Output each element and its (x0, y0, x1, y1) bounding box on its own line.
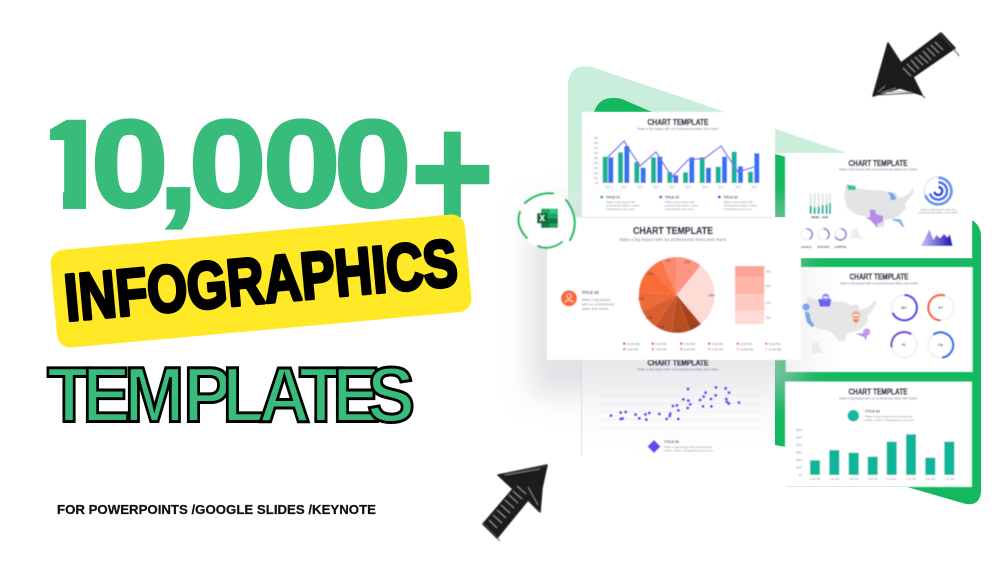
legend: title 02: TITLE 02 (665, 195, 679, 199)
bar chart: $300 (796, 451, 803, 455)
callout: title 01: TITLE 01 (865, 410, 880, 414)
bars and trend line: $50 (594, 157, 599, 160)
bar strip: mon-sat (810, 193, 831, 219)
dark green backdrop shape (594, 98, 981, 504)
time legend: 9:00 PM (712, 347, 723, 351)
stacked percentage bar: 5% (766, 301, 771, 305)
callout: title 01: TITLE 01 (664, 440, 679, 444)
stacked percentage bar: 8% (766, 284, 771, 288)
bar chart: 7:00 PM (944, 477, 954, 481)
pie chart (638, 257, 715, 333)
donut: FL (891, 332, 917, 358)
purple donut stats (801, 229, 847, 249)
headline: 10,000+: 0 (91, 94, 168, 233)
slide title: CHART TEMPLATE (848, 388, 908, 396)
slide subtitle: Make a big impact with our professional slides and charts (638, 368, 719, 372)
time legend: 10:00 PM (740, 347, 754, 351)
legend: title 01 (600, 195, 640, 211)
bars and trend line: 2016 (702, 186, 708, 189)
purple donut stats: GOALS (801, 245, 811, 249)
donut: KY (928, 295, 953, 320)
US map with highlighted states (844, 185, 914, 240)
bars and trend line: 2019 (751, 186, 757, 189)
headline: 10,000+: 0 (263, 94, 340, 233)
slide: grouped bar and line chart (582, 112, 775, 217)
headline: 10,000+: 0 (334, 94, 411, 233)
time legend: 6:00 PM (626, 347, 638, 351)
time legend: 4:00 PM (740, 342, 752, 346)
pie chart: 5% (691, 325, 695, 329)
legend: title 02 (659, 195, 699, 211)
stacked percentage bar: 5% (766, 270, 771, 274)
callout: title 01: Make a big impact with professional (664, 445, 712, 449)
bar chart: 6:00 PM (925, 477, 935, 481)
bar chart: $200 (796, 458, 803, 462)
concentric ring gauge (919, 177, 958, 215)
legend: title 02: professional slides, charts, (665, 204, 699, 208)
donut: KY: KY (938, 306, 944, 310)
pie chart: 9% (666, 259, 670, 263)
bars and trend line: 2014 (669, 186, 675, 189)
callout: title 01: Make a big impact with professional (865, 414, 913, 418)
slide title: CHART TEMPLATE (850, 272, 909, 282)
time legend: 8:00 PM (684, 347, 695, 351)
bar chart: $100 (796, 465, 803, 469)
legend: title 03 (718, 195, 758, 211)
slide title: CHART TEMPLATE (648, 358, 708, 368)
concentric ring gauge: professional slides and charts (919, 211, 958, 215)
slide title: CHART TEMPLATE (848, 159, 908, 168)
pie chart: 12% (684, 260, 690, 264)
bars and trend line: 2015 (685, 186, 691, 189)
bars and trend line: $0 (595, 182, 599, 185)
pie chart: 28% (708, 294, 715, 298)
bars and trend line: $90 (594, 137, 599, 140)
donut: WY: WY (901, 306, 907, 310)
icon: Excel: X (540, 214, 546, 223)
bars and trend line: 2017 (718, 186, 724, 189)
bars and trend line: $70 (594, 147, 599, 150)
slide: scatter plot (582, 358, 774, 456)
legend: title 03: professional slides, charts, (724, 204, 758, 208)
time legend: 7:00 PM (655, 347, 667, 351)
bar strip: mon-sat: MON - SAT (811, 215, 829, 219)
bar chart: 4:00 PM (887, 477, 897, 481)
callout: title 01 (648, 440, 714, 453)
bars and trend line (594, 137, 759, 189)
headline: 10,000+: 1 (34, 95, 111, 233)
time legend (623, 342, 782, 351)
bar chart: $0 (799, 473, 803, 477)
bar chart: 1:00 PM (829, 477, 839, 481)
pie chart: 12% (638, 297, 644, 301)
bars and trend line: 2010 (605, 186, 611, 189)
map with location pins (802, 294, 877, 354)
bars and trend line: $20 (594, 172, 599, 175)
slide subtitle: Make a big impact with our professional slides and charts (839, 396, 917, 400)
pie chart: 8% (677, 329, 681, 333)
subtitle: supported apps: FOR POWERPOINTS /GOOGLE SLIDES /KEYNOTE (57, 502, 376, 517)
badge: Excel icon in dashed ring (519, 193, 575, 249)
purple donut stats: CAPITAL (834, 245, 847, 249)
callout: title 01 (561, 290, 614, 311)
pie chart: 8% (660, 326, 664, 330)
time legend: 1:00 PM (655, 342, 667, 346)
bar chart: 3:00 PM (868, 477, 878, 481)
bars and trend line: 2018 (735, 186, 741, 189)
legend: title 02: Make a big impact with (665, 200, 695, 204)
pie chart: 14% (647, 272, 653, 276)
sketch arrow: top right (873, 33, 959, 98)
legend: title 02: infographics and more. (665, 207, 695, 211)
donut: CA (928, 332, 953, 358)
legend: title 01: professional slides, charts, (606, 204, 640, 208)
legend: title 03: infographics and more. (724, 207, 753, 211)
slide subtitle: Make a big impact with our professional slides and charts (620, 237, 727, 242)
legend: title 01: TITLE 01 (606, 195, 620, 199)
concentric ring gauge: Make a big impact with our (921, 208, 956, 212)
slide: teal bar chart (785, 382, 972, 487)
callout: title 01: slides, charts, infographics and more. (664, 448, 714, 452)
slide: pie chart (foreground) (547, 218, 801, 360)
time legend: 12:00 PM (626, 342, 640, 346)
headline: 10,000+: + (410, 81, 495, 266)
bars and trend line: 2013 (653, 186, 659, 189)
legend: title 01: Make a big impact with (606, 200, 636, 204)
scatter chart (600, 379, 760, 428)
callout: title 01: Make a big impact (582, 298, 610, 302)
heading: TEMPLATES: TEMPLATES (47, 351, 415, 438)
yellow banner: INFOGRAPHICS: INFOGRAPHICS (61, 225, 460, 335)
bar chart: $400 (796, 443, 803, 447)
time legend: 11:00 PM (768, 347, 782, 351)
bar chart: 5:00 PM (906, 477, 916, 481)
bars and trend line: $40 (594, 162, 599, 165)
legend: title 03: TITLE 03 (724, 195, 738, 199)
slide subtitle: Make a big impact with our professional slides and charts (839, 168, 917, 172)
bar chart: $500 (796, 436, 803, 440)
bars and trend line: $60 (594, 152, 599, 155)
sketch arrow: bottom left (483, 465, 547, 541)
bars and trend line: $80 (594, 142, 599, 145)
donut: FL: FL (902, 343, 906, 347)
callout: title 01 (848, 410, 915, 422)
area chart (921, 229, 953, 246)
slide subtitle: Make a big impact with our professional slides and charts (840, 282, 918, 286)
bars and trend line: 2012 (637, 186, 643, 189)
time legend: 3:00 PM (712, 342, 723, 346)
time legend: 5:00 PM (768, 342, 780, 346)
donut: CA: CA (938, 343, 944, 347)
bar chart: 12:00 PM (809, 477, 821, 481)
bars and trend line: 2011 (621, 186, 627, 189)
bar chart (796, 428, 954, 481)
pie chart: 10% (646, 316, 652, 320)
callout: title 01: TITLE 01 (582, 290, 600, 295)
slide: US map with donuts (786, 267, 973, 372)
callout: title 01: slides and charts. (582, 307, 609, 311)
slide title: CHART TEMPLATE (633, 225, 713, 237)
purple donut stats: JUSTICE (817, 245, 830, 249)
time legend: 2:00 PM (684, 342, 695, 346)
bar chart: $600 (796, 428, 803, 432)
callout: title 01: with our professional (582, 302, 614, 306)
slide: map with states and stats (785, 153, 972, 258)
legend: title 01: infographics and more. (606, 207, 636, 211)
stacked percentage bar: 5% (766, 316, 771, 320)
stacked percentage bar (735, 266, 771, 324)
bar chart: 2:00 PM (849, 477, 859, 481)
light green backdrop shape (568, 66, 847, 216)
bars and trend line: $30 (594, 167, 599, 170)
headline: 10,000+ (50, 118, 490, 230)
slide subtitle: Make a big impact with our professional slides and charts (638, 127, 719, 131)
callout: title 01: slides, charts, infographics and more. (865, 418, 915, 422)
headline: 10,000+: 0 (189, 94, 266, 233)
legend: title 03: Make a big impact with (724, 200, 753, 204)
slide title: CHART TEMPLATE (648, 118, 708, 127)
soft drop shadow (530, 205, 800, 395)
donut: WY (892, 295, 917, 320)
bars and trend line: $10 (594, 177, 599, 180)
headline: 10,000+: , (158, 91, 198, 236)
